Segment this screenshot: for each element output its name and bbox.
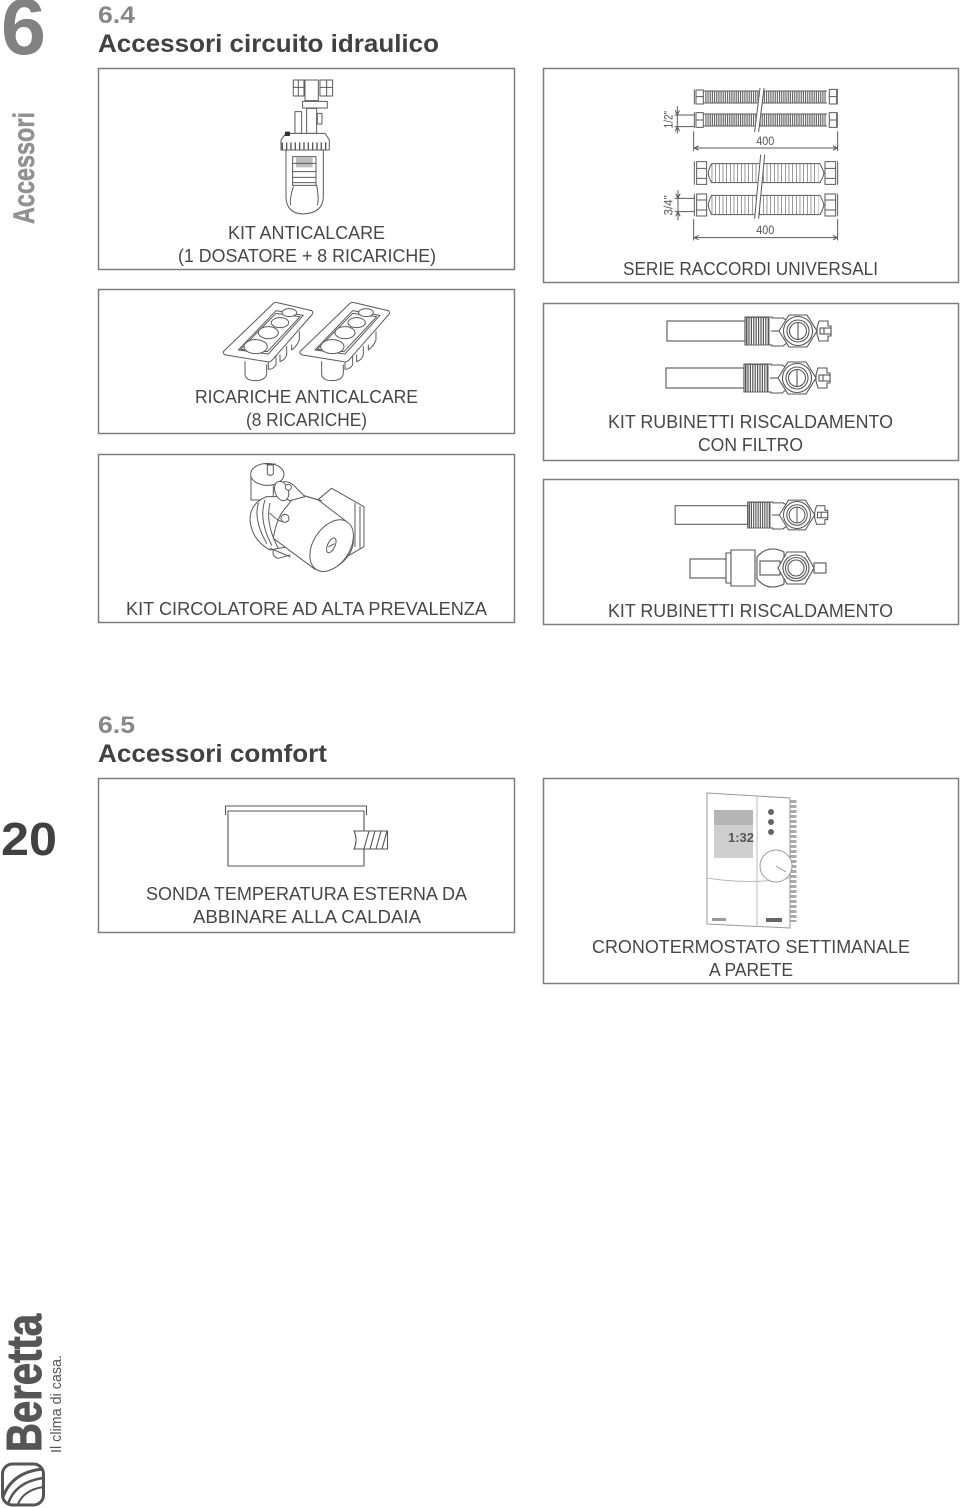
label line 2: (8 RICARICHE) <box>246 409 367 430</box>
panel: kit circolatore <box>98 454 514 622</box>
heading: Accessori comfort: Accessori comfort <box>98 740 328 768</box>
chapter name: Accessori <box>8 112 41 224</box>
label: CRONOTERMOSTATO SETTIMANALE <box>592 936 910 957</box>
tagline: Il clima di casa. <box>48 1355 65 1453</box>
diagram: flexible hoses with dimensions: 400 <box>756 223 775 237</box>
icon: valve with filter <box>667 315 831 347</box>
diagram: flexible hoses with dimensions: 3/4" <box>662 195 676 215</box>
icon: wall thermostat: 1:32 <box>728 830 754 845</box>
icon: outdoor sensor <box>226 806 388 866</box>
label: RICARICHE ANTICALCARE <box>195 386 418 407</box>
icon: wall thermostat <box>707 793 794 928</box>
diagram: flexible hoses with dimensions: 400 <box>756 134 775 148</box>
section number 6.5: 6.5 <box>98 712 135 739</box>
icon: valve <box>675 500 828 530</box>
icon: anticalcare dosing unit <box>281 80 333 214</box>
label line 2: (1 DOSATORE + 8 RICARICHE) <box>178 245 436 266</box>
icon: refill trays <box>223 302 389 381</box>
label: SONDA TEMPERATURA ESTERNA DA <box>146 883 468 904</box>
label line 2: CON FILTRO <box>698 434 803 455</box>
label: KIT ANTICALCARE <box>228 222 385 243</box>
label line 2: A PARETE <box>709 959 793 980</box>
heading: Accessori circuito idraulico: Accessori circuito idraulico <box>98 30 439 58</box>
panel: cronotermostato <box>544 778 958 984</box>
logo: Beretta <box>0 1313 65 1505</box>
panel: sonda temperatura esterna <box>98 778 514 932</box>
panel: kit rubinetti con filtro <box>544 304 958 460</box>
label: SERIE RACCORDI UNIVERSALI <box>623 258 878 279</box>
panel: ricariche anticalcare <box>98 290 514 434</box>
icon: circulator pump <box>250 463 364 579</box>
label: KIT RUBINETTI RISCALDAMENTO <box>608 600 893 621</box>
section number 6.4: 6.4 <box>98 2 136 29</box>
panel: kit rubinetti riscaldamento <box>544 480 958 624</box>
icon: second valve with filter <box>666 362 830 394</box>
icon: logo mark <box>2 1464 44 1505</box>
panel: serie raccordi universali <box>544 68 958 282</box>
diagram: flexible hoses with dimensions <box>662 88 838 240</box>
label: KIT RUBINETTI RISCALDAMENTO <box>608 411 893 432</box>
icon: ball valve <box>690 549 826 587</box>
page number: 20 <box>1 813 57 865</box>
label: KIT CIRCOLATORE AD ALTA PREVALENZA <box>126 598 488 619</box>
diagram: flexible hoses with dimensions: 1/2" <box>662 111 676 128</box>
label line 2: ABBINARE ALLA CALDAIA <box>193 906 422 927</box>
panel: kit anticalcare <box>98 68 514 270</box>
